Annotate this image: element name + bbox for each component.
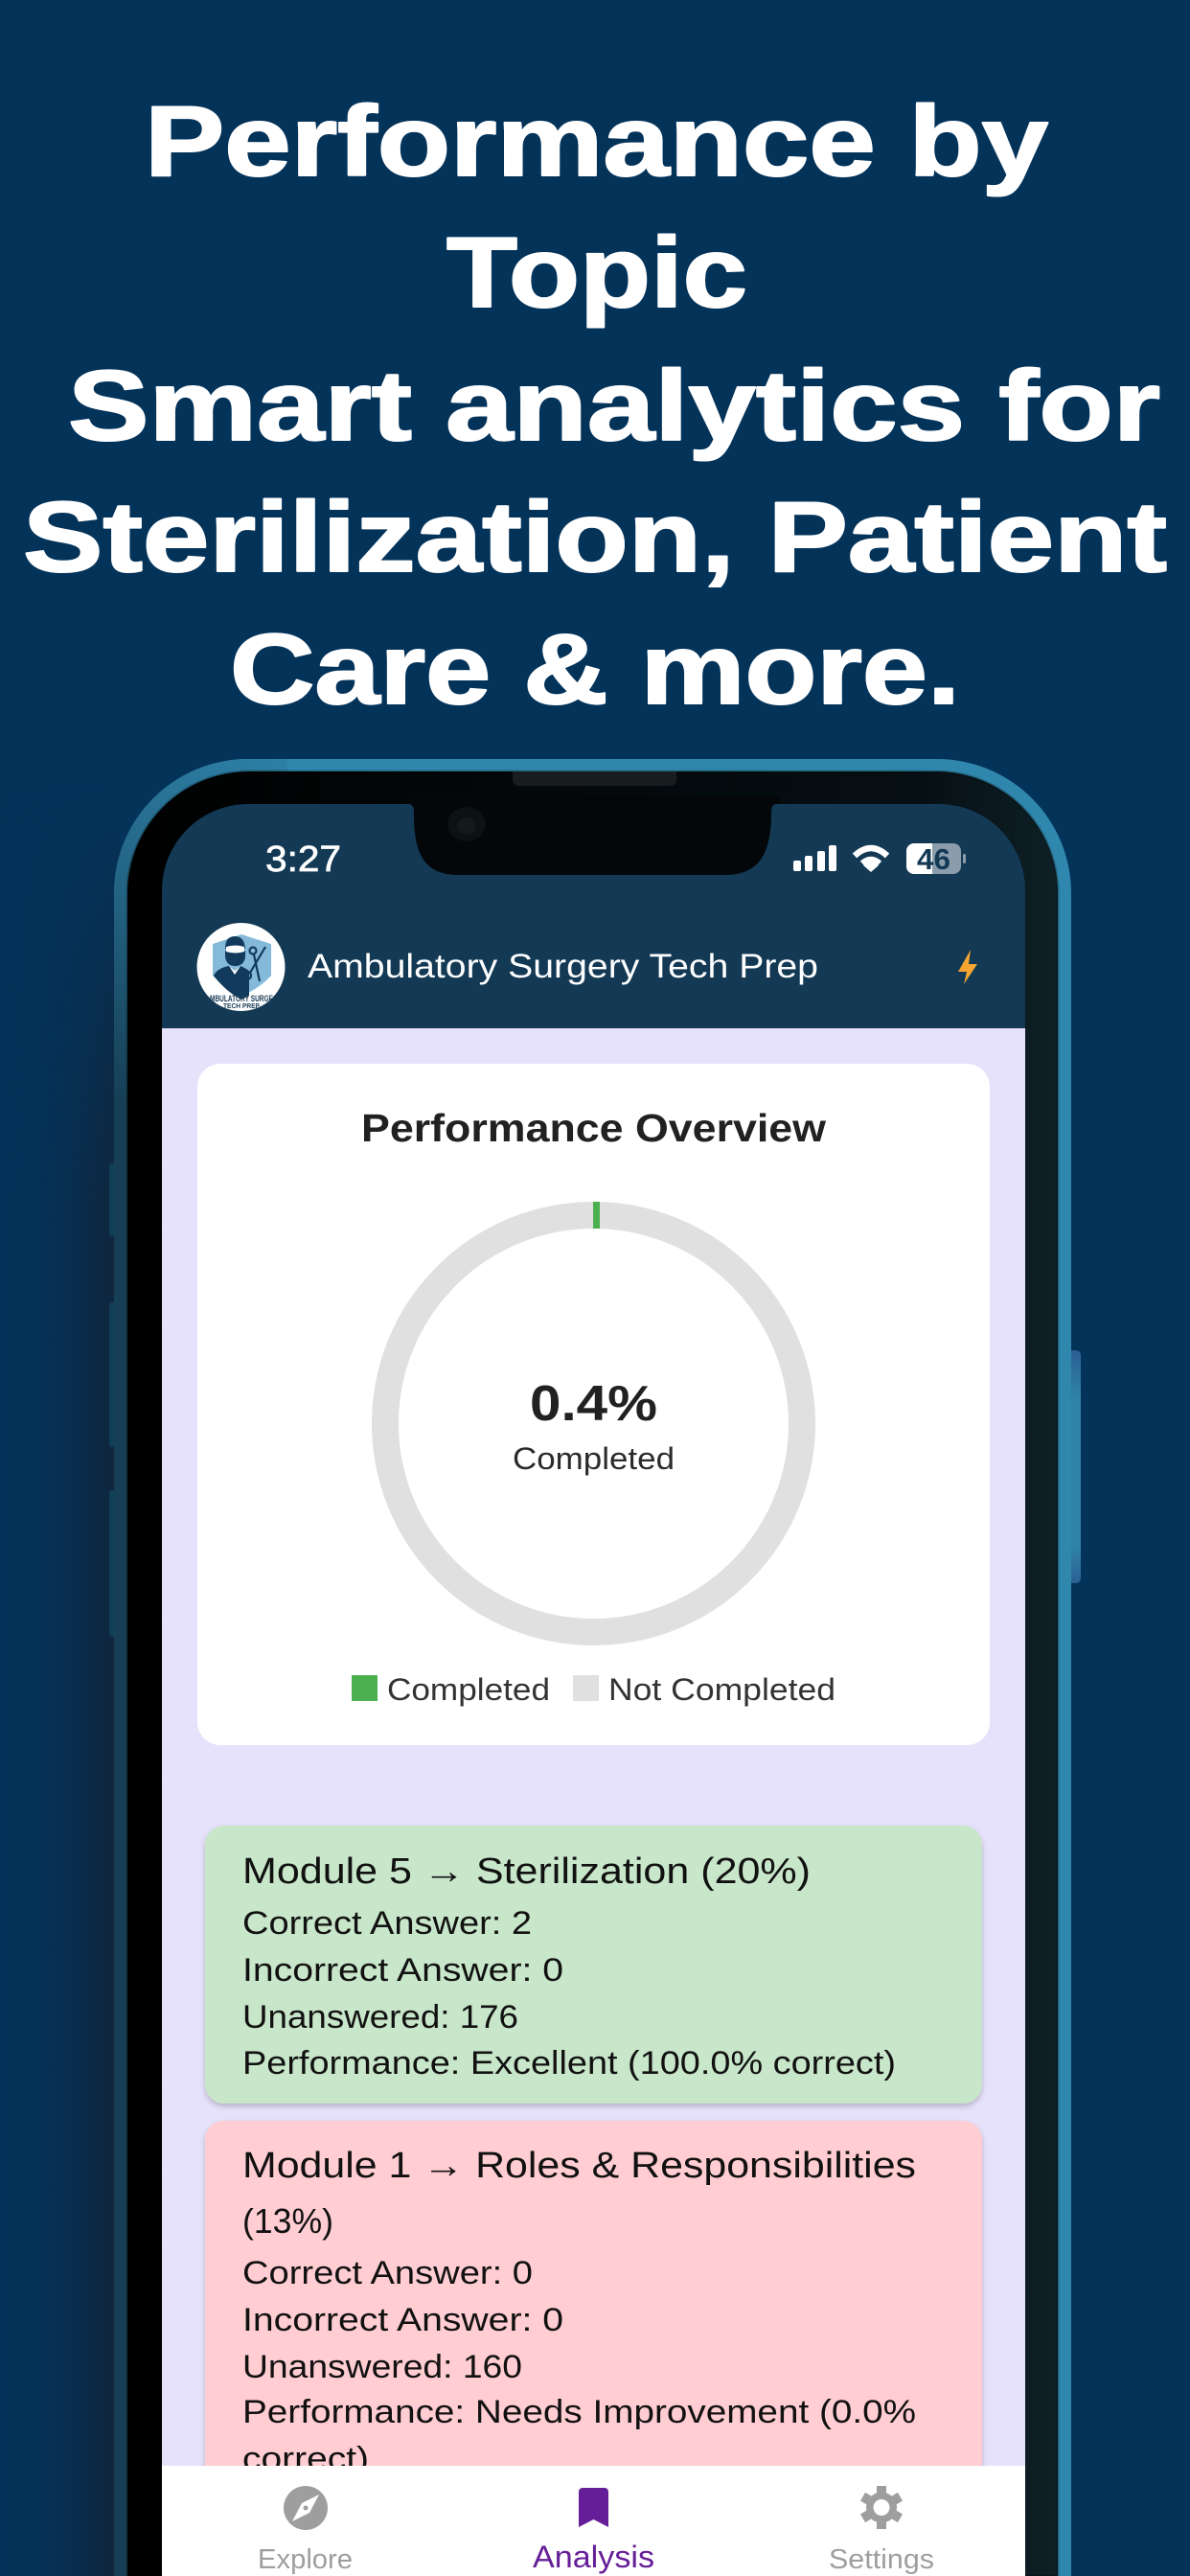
label: settings: Settings (829, 2544, 934, 2575)
panel: module 5 sterilization (205, 1826, 982, 2104)
panel: module 1 roles and responsibilities: Unanswered: 160 (242, 2349, 522, 2385)
icon: bookmark (579, 2488, 608, 2527)
icon: battery 46 (906, 842, 966, 876)
speaker (513, 771, 676, 786)
screen (162, 795, 1025, 2576)
title: Care & more. (230, 614, 960, 725)
panel: module 5 sterilization: Performance: Excellent (100.0% correct) (242, 2045, 896, 2082)
background (57, 893, 114, 2576)
donut chart: Completed (513, 1441, 675, 1476)
legend: Not Completed (608, 1672, 835, 1707)
legend: Completed (387, 1672, 550, 1707)
app header (162, 804, 1025, 1028)
panel: module 1 roles and responsibilities: Incorrect Answer: 0 (242, 2302, 563, 2338)
panel: module 5 sterilization: Correct Answer: 2 (242, 1905, 532, 1942)
app name: Ambulatory Surgery Tech Prep (308, 948, 818, 985)
phone bezel (127, 771, 1058, 2576)
title: Performance by (145, 86, 1048, 197)
panel: module 5 sterilization: Module 5 → Sterilization (20%) (242, 1852, 811, 1892)
panel: module 1 roles and responsibilities: (13%) (242, 2201, 333, 2241)
heading: Performance Overview (361, 1106, 826, 1150)
notch (404, 795, 779, 875)
status time: 3:27 (265, 840, 341, 880)
panel: module 1 roles and responsibilities: Performance: Needs Improvement (0.0% (242, 2394, 916, 2430)
title: Topic (446, 218, 747, 329)
icon: bolt (958, 950, 977, 984)
screen body (162, 1028, 1025, 2466)
donut chart: 0.4% (530, 1376, 657, 1432)
icon: front camera (447, 807, 486, 841)
label: explore: Explore (258, 2544, 353, 2575)
icon: right side button (1065, 1350, 1081, 1583)
phone rim (114, 759, 1071, 2576)
panel: module 1 roles and responsibilities: Correct Answer: 0 (242, 2255, 533, 2291)
panel: module 1 roles and responsibilities: Module 1 → Roles & Responsibilities (242, 2146, 916, 2186)
title: Sterilization, Patient (23, 482, 1167, 593)
icon: compass (284, 2486, 328, 2530)
app logo: TECH PREP (223, 1001, 260, 1010)
app logo (197, 923, 286, 1011)
panel: module 1 roles and responsibilities (202, 2121, 985, 2466)
title (23, 86, 1167, 725)
icon: left side buttons (109, 1163, 117, 1637)
app logo: MBULATORY SURGE (210, 994, 273, 1003)
icon: wifi (855, 848, 887, 872)
title: Smart analytics for (68, 351, 1160, 462)
legend (352, 1672, 835, 1707)
bottom navigation (162, 2466, 1025, 2576)
icon: gear (862, 2486, 901, 2529)
icon: battery 46: 46 (917, 842, 950, 876)
panel: module 5 sterilization: Unanswered: 176 (242, 1999, 518, 2036)
panel: performance overview (197, 1064, 990, 1745)
icon: signal bars (793, 845, 836, 871)
phone frame (109, 759, 1081, 2576)
panel: module 5 sterilization: Incorrect Answer: 0 (242, 1952, 563, 1989)
donut chart (385, 1202, 802, 1632)
panel: module 1 roles and responsibilities: correct) (242, 2441, 369, 2477)
label: analysis: Analysis (533, 2540, 654, 2574)
